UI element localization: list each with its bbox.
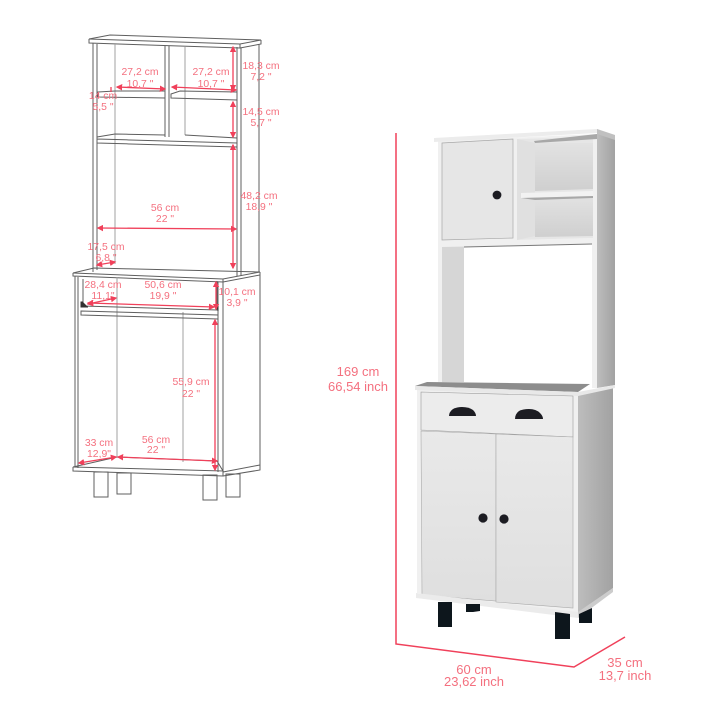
dimension labels on line drawing: 56 cm	[142, 435, 170, 446]
dimension labels on line drawing	[85, 61, 279, 460]
dimension labels on line drawing: 19,9 "	[150, 291, 177, 302]
hutch top board	[434, 129, 615, 142]
dimension labels on line drawing: 22 "	[156, 214, 174, 225]
dimension labels on line drawing: 12,9"	[87, 449, 111, 460]
dimension labels on line drawing: 17,5 cm	[88, 242, 124, 253]
hutch under-shelf	[442, 238, 593, 246]
dimension labels on line drawing: 6,8 "	[95, 253, 117, 264]
product: kitchen pantry cabinet	[415, 129, 615, 639]
dimension labels on line drawing: 56 cm	[151, 203, 179, 214]
overall dimension labels: 169 cm	[337, 364, 379, 379]
hutch posts and dividers	[93, 43, 259, 276]
base top board	[73, 268, 260, 282]
dimension labels on line drawing: 5,7 "	[250, 118, 272, 129]
base front	[417, 389, 578, 613]
overall dimension labels: 23,62 inch	[444, 674, 504, 689]
overall dimension labels	[328, 364, 651, 689]
dimension labels on line drawing: 55,9 cm	[173, 377, 209, 388]
dimension labels on line drawing: 18,3 cm	[243, 61, 279, 72]
red dimension arrows on line drawing	[79, 47, 236, 470]
drawer front	[421, 392, 573, 437]
dimension labels on line drawing: 22 "	[147, 445, 165, 456]
drawer handle right	[515, 409, 543, 419]
overall dimension labels: 60 cm	[456, 662, 492, 677]
left door	[421, 431, 496, 601]
line drawing: cabinet technical elevation	[73, 35, 261, 500]
hutch front frame	[438, 134, 597, 388]
dimension labels on line drawing: 14,5 cm	[243, 107, 279, 118]
counter edge	[415, 385, 615, 396]
base side panel	[578, 387, 613, 613]
bottom lip	[416, 593, 578, 618]
door knobs	[478, 513, 488, 523]
dimension labels on line drawing: 22 "	[182, 389, 200, 400]
dimension labels on line drawing: 33 cm	[85, 438, 113, 449]
base bottom board	[73, 457, 260, 476]
overall dimension labels: 66,54 inch	[328, 379, 388, 394]
outline legs	[94, 472, 240, 500]
open compartment	[517, 137, 593, 240]
hutch upper section	[434, 129, 615, 388]
base carcass	[75, 275, 260, 472]
door knob	[493, 191, 501, 199]
base lower section	[415, 382, 615, 639]
counter surface	[415, 382, 590, 392]
hutch door	[442, 139, 513, 240]
overall dimension labels: 13,7 inch	[599, 668, 651, 683]
drawer handle left	[449, 407, 476, 416]
black legs	[438, 602, 592, 639]
dimension labels on line drawing: 27,2 cm	[122, 67, 158, 78]
overall dimension lines	[396, 133, 625, 667]
dimension labels on line drawing: 3,9 "	[226, 298, 248, 309]
dimension labels on line drawing: 10,7 "	[198, 79, 225, 90]
overall dimension labels: 35 cm	[607, 655, 643, 670]
hutch side panel	[597, 133, 615, 388]
hutch left back panel	[442, 243, 464, 382]
right door	[496, 434, 573, 608]
dimension labels on line drawing: 27,2 cm	[193, 67, 229, 78]
dimension labels on line drawing: 5,5 "	[92, 102, 114, 113]
dimension labels on line drawing: 28,4 cm	[85, 280, 121, 291]
dimension labels on line drawing: 7,2 "	[250, 72, 272, 83]
dimension labels on line drawing: 48,2 cm	[241, 191, 277, 202]
dimension labels on line drawing: 10,7 "	[127, 79, 154, 90]
hutch shelves	[97, 91, 237, 147]
drawer opening	[81, 279, 218, 319]
dimension labels on line drawing: 50,6 cm	[145, 280, 181, 291]
dimension labels on line drawing: 18,9 "	[246, 202, 273, 213]
dimension labels on line drawing: 10,1 cm	[219, 287, 255, 298]
dimension labels on line drawing: 11,1"	[91, 291, 115, 302]
dimension labels on line drawing: 14 cm	[89, 91, 117, 102]
hutch top board	[89, 35, 261, 48]
